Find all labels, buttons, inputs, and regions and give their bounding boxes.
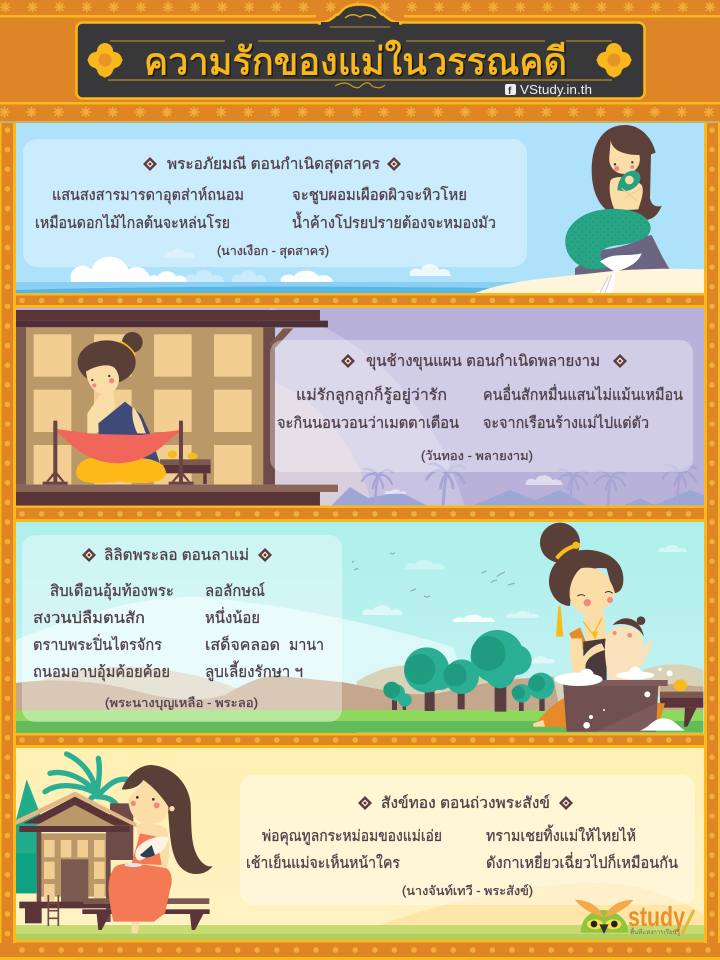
icon: right flower diamond [596, 43, 632, 78]
heading: Lilit Phra Lo: ลิลิตพระลอ ตอนลาแม่ [104, 547, 249, 564]
poem text [246, 824, 678, 872]
source credit: (พระนางบุญเหลือ - พระลอ) [105, 696, 258, 711]
illustration: house and weaving woman [16, 310, 338, 506]
baby [605, 616, 653, 680]
source credit: (วันทอง - พลายงาม) [421, 449, 533, 463]
poem text: หนึ่งน้อย [205, 607, 260, 627]
poem text: สิบเดือนอุ้มท้องพระ [50, 582, 174, 601]
mother [533, 523, 665, 727]
poem text: ลอลักษณ์ [205, 582, 265, 600]
poem text: จะกินนอนวอนว่าเมตตาเตือน [277, 414, 459, 432]
poem text: มานา [289, 637, 324, 654]
poem text: พ่อคุณทูลกระหม่อมของแม่เอ่ย [262, 828, 442, 846]
poem text: ลูบเลี้ยงรักษา ฯ [205, 660, 303, 682]
wooden tub and foam [555, 667, 685, 732]
heading: Sang Thong: สังข์ทอง ตอนถ่วงพระสังข์ [381, 794, 550, 812]
woman [109, 765, 213, 933]
illustration: mermaid and baby [473, 125, 704, 295]
text box: mermaid poem [23, 139, 527, 267]
left landscape behind poem [16, 597, 480, 734]
poem text: เหมือนดอกไม้ไกลต้นจะหล่นโรย [35, 214, 230, 232]
poem text: สงวนบ่ลืมตนสัก [33, 609, 145, 627]
poem text [33, 582, 324, 682]
icon: left flower diamond [87, 43, 123, 78]
poem text [277, 384, 683, 432]
panel: weaving house scene [16, 308, 704, 516]
birds [352, 553, 515, 597]
panel: bathing baby scene [16, 522, 704, 734]
logo: Vstudy owl: study [628, 901, 685, 932]
heading: Phra Aphai Mani: พระอภัยมณี ตอนกำเนิดสุดสาคร [167, 156, 380, 174]
poem text: ถนอมอาบอุ้มค้อยค้อย [33, 664, 170, 682]
ladder [48, 895, 58, 926]
source credit: (นางจันท์เทวี - พระสังข์) [402, 884, 533, 898]
poem text: ทรามเชยทิ้งแม่ให้ไหยไห้ [486, 824, 636, 845]
poem text: เช้าเย็นแม่จะเห็นหน้าใคร [246, 853, 400, 872]
text box: Sang Thong poem [240, 775, 695, 905]
title text: ความรักของแม่ในวรรณคดี [146, 42, 568, 85]
heading: Khun Chang Khun Phaen: ขุนช้างขุนแผน ตอนกำเนิดพลายงาม [366, 353, 600, 371]
clouds [362, 545, 687, 663]
title plaque: ความรักของแม่ในวรรณคดี [144, 40, 567, 84]
source credit: (นางเงือก - สุดสาคร) [217, 244, 329, 259]
facebook credit: f [508, 86, 512, 97]
poem text: เสด็จคลอด [205, 635, 280, 654]
poem text: จะจากเรือนร้างแม่ไปแต่ตัว [483, 414, 649, 432]
panel: mermaid scene [16, 123, 704, 295]
poem text: ตราบพระปิ่นไตรจักร [33, 634, 162, 654]
logo: Vstudy owl [575, 900, 694, 936]
palm silhouettes [362, 464, 696, 516]
table with gold pots [160, 450, 211, 484]
poem text: คนอื่นสักหมื่นแสนไม่แม้นเหมือน [483, 384, 683, 404]
poem text: จะชูบผอมเผือดผิวจะหิวโหย [292, 186, 467, 205]
bench [82, 898, 210, 930]
panel: Sang Thong scene [16, 748, 704, 940]
trees [383, 630, 554, 712]
poem text: ดังกาเหยี่ยวเฉี่ยวไปก็เหมือนกัน [486, 852, 678, 872]
table and gold pot [660, 679, 703, 727]
text box: Khun Chang Khun Phaen poem [270, 340, 693, 472]
illustration: house, palm and woman with conch [16, 754, 213, 933]
crest ornament [318, 4, 402, 24]
poem text: แสนสงสารมารดาอุตส่าห์ถนอม [52, 186, 244, 205]
facebook credit: VStudy.in.th [520, 82, 592, 97]
title plaque [76, 4, 644, 98]
logo: Vstudy owl: พื้นที่แห่งการเรียนรู้ [630, 926, 681, 936]
poem text: แม่รักลูกลูกก็รู้อยู่ว่ารัก [296, 385, 447, 405]
text box: Lilit Phra Lo poem [22, 535, 342, 722]
poem text: น้ำค้างโปรยปรายต้องจะหมองมัว [292, 211, 496, 232]
illustration: landscape, mother and baby [340, 523, 703, 733]
poem text [35, 186, 496, 232]
